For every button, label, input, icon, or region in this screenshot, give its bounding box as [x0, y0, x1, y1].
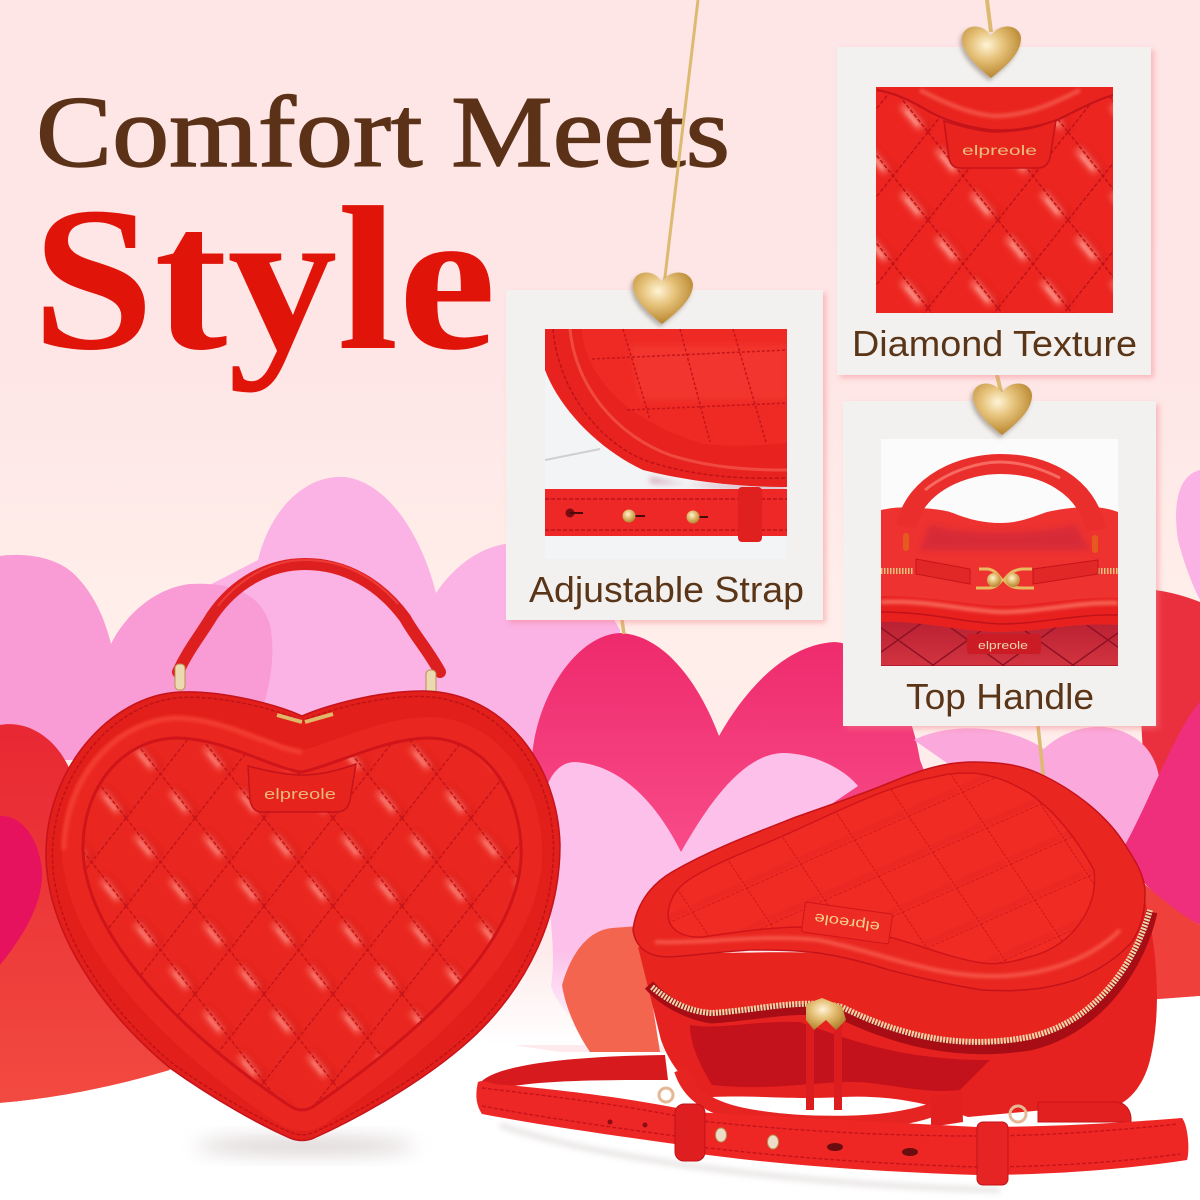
heart: left hot pink	[0, 816, 42, 965]
handle photo: elpreole	[978, 640, 1028, 652]
bag rings	[175, 664, 436, 696]
logo tab: elpreole	[813, 910, 881, 936]
mid band	[638, 910, 1150, 1042]
strap rear loop	[478, 1055, 668, 1090]
heart: right red	[1140, 590, 1200, 880]
panel: diamond texture	[837, 47, 1151, 375]
heart: lower light pink pair	[541, 753, 858, 1030]
panel: adjustable strap	[506, 290, 823, 620]
handle	[902, 454, 1099, 508]
rim highlight	[64, 718, 302, 850]
bag back top	[881, 507, 1118, 632]
panel: top handle	[843, 401, 1156, 726]
icon: gold heart texture	[962, 26, 1021, 78]
texture photo: elpreole	[962, 142, 1037, 158]
lid quilted top	[668, 773, 1095, 964]
handle rings	[903, 533, 909, 551]
zipper and tabs	[881, 568, 1118, 574]
hanging string: handle panel	[997, 375, 1001, 392]
floor fade	[380, 950, 680, 1045]
label: Adjustable Strap: Adjustable Strap	[529, 569, 804, 610]
right tab	[1038, 1102, 1131, 1122]
quilted area	[582, 329, 787, 446]
side ring	[1010, 1106, 1026, 1122]
heart: salmon	[562, 926, 660, 1052]
label: Diamond Texture: Diamond Texture	[852, 323, 1137, 364]
label: Top Handle: Top Handle	[906, 676, 1094, 717]
lid rim	[633, 762, 1145, 991]
strap crossing loop	[681, 1070, 955, 1123]
texture photo	[876, 87, 1113, 313]
strap holes	[827, 1143, 843, 1151]
bag outer rim	[46, 691, 560, 1140]
leather logo tab	[248, 764, 356, 812]
leather logo tab	[967, 634, 1041, 654]
heart: light pink rear centre	[140, 477, 620, 900]
white floor	[0, 996, 1200, 1200]
bag handle	[178, 560, 440, 672]
strap studs	[716, 1128, 726, 1142]
clasp	[976, 569, 1034, 588]
logo tab	[801, 902, 893, 944]
heart: right lower red	[1135, 875, 1200, 1000]
icon: gold heart handle	[973, 383, 1032, 435]
zipper teeth	[652, 910, 1150, 1042]
quilted panel	[83, 738, 521, 1110]
heart: left pink lobes	[0, 555, 272, 760]
quilted lower	[881, 622, 1118, 666]
hanging string: below strap panel	[622, 620, 624, 634]
bag: angled view	[476, 762, 1188, 1190]
raised rim	[83, 738, 521, 1110]
strap main	[693, 1112, 1188, 1175]
strap connector tab	[931, 1090, 963, 1127]
leather logo tab	[944, 120, 1056, 168]
outer seam	[52, 696, 554, 1135]
strap belt	[545, 489, 787, 536]
title line: Style: Style	[32, 164, 496, 393]
title	[32, 76, 730, 393]
lid highlight	[655, 930, 1120, 976]
zipper tape	[649, 912, 1152, 1049]
title line: Comfort Meets: Comfort Meets	[36, 76, 730, 189]
zipper pulls	[277, 714, 333, 722]
heart: magenta pair	[532, 633, 950, 880]
handle photo	[881, 439, 1118, 666]
hanging string: below top handle	[1038, 726, 1045, 790]
strap seams	[482, 1088, 1180, 1167]
heart: right light pink	[914, 727, 1160, 845]
strap left front	[476, 1081, 677, 1144]
bag: front view	[46, 560, 560, 1155]
icon: gold heart strap	[633, 272, 693, 324]
heart: upper right pink	[1176, 470, 1200, 600]
heart: right hot pink	[1125, 702, 1200, 925]
logo: elpreole	[264, 786, 336, 803]
heart: left red	[0, 724, 170, 1103]
hanging string: top strap	[664, 0, 698, 285]
strap photo	[544, 329, 787, 559]
bag shadow	[195, 1137, 415, 1155]
left ring	[659, 1088, 673, 1102]
hanging string: diamond panel	[987, 0, 991, 32]
bag edge	[544, 329, 787, 487]
strap holes and studs	[566, 508, 574, 518]
strap shadow	[500, 1125, 1000, 1190]
zipper pulls	[806, 998, 846, 1110]
paper hearts backdrop	[0, 470, 1200, 1103]
bag lower body	[647, 900, 1157, 1117]
strap keepers	[675, 1104, 705, 1161]
rim waves	[881, 596, 1118, 632]
recessed front	[690, 1022, 990, 1091]
